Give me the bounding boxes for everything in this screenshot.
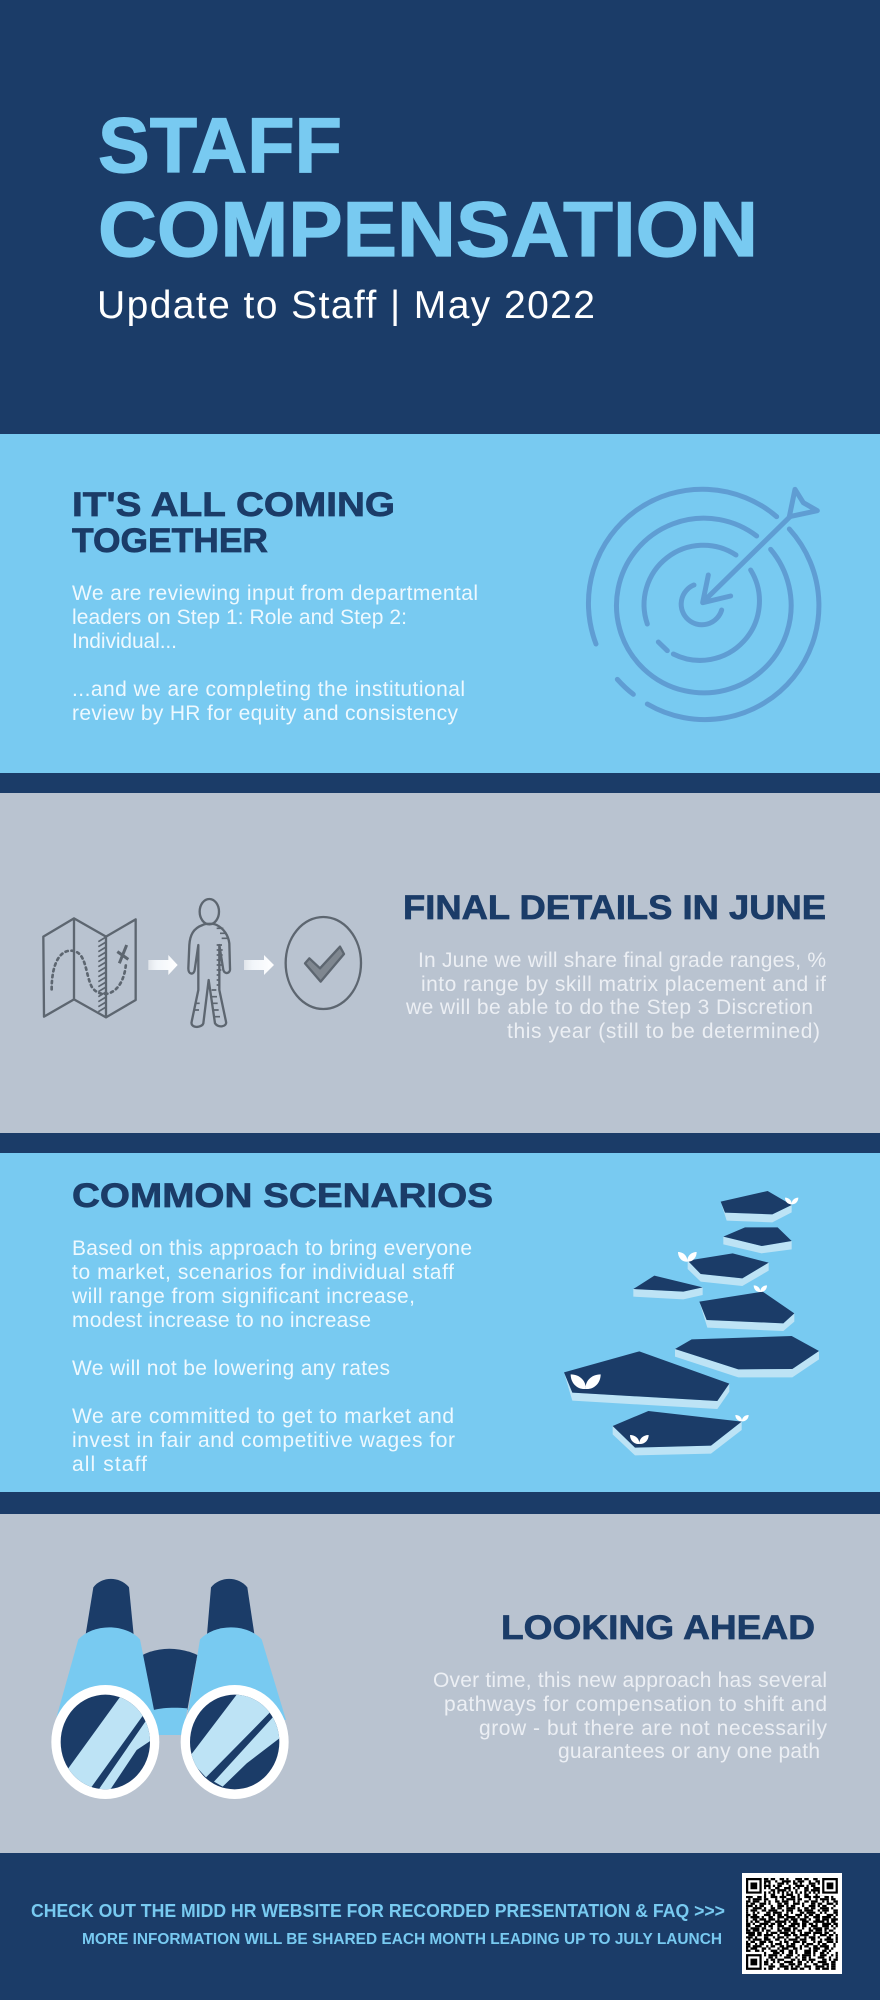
body text: all staff <box>72 1453 147 1476</box>
heading <box>72 486 395 560</box>
panel: common scenarios <box>0 1153 880 1492</box>
body text: Based on this approach to bring everyone <box>72 1237 472 1260</box>
icon: arrow <box>148 955 178 975</box>
panel: it's all coming together <box>0 434 880 773</box>
body text: ...and we are completing the institutional <box>72 678 465 701</box>
body text: In June we will share final grade ranges, % <box>418 949 826 972</box>
heading: TOGETHER <box>72 522 268 560</box>
body text: to market, scenarios for individual staff <box>72 1261 454 1284</box>
title <box>98 101 758 273</box>
icon group: map, person, check <box>43 899 361 1027</box>
body text: We are committed to get to market and <box>72 1405 454 1428</box>
icon: person <box>188 899 230 1027</box>
body text <box>433 1669 828 1763</box>
heading: LOOKING AHEAD <box>501 1609 815 1647</box>
body text: leaders on Step 1: Role and Step 2: <box>72 606 407 629</box>
body text <box>71 1237 472 1476</box>
icon: binoculars <box>51 1579 289 1799</box>
title: STAFF <box>98 101 342 189</box>
body text: this year (still to be determined) <box>507 1020 820 1043</box>
icon: arrow <box>244 955 274 975</box>
subtitle: Update to Staff | May 2022 <box>97 284 595 327</box>
heading: FINAL DETAILS IN JUNE <box>403 889 826 927</box>
body text: pathways for compensation to shift and <box>444 1693 827 1716</box>
body text: Over time, this new approach has several <box>433 1669 827 1692</box>
panel: final details in june <box>0 793 880 1133</box>
title: COMPENSATION <box>98 185 758 273</box>
body text: into range by skill matrix placement and if <box>421 973 826 996</box>
body text: grow - but there are not necessarily <box>479 1717 828 1740</box>
heading: COMMON SCENARIOS <box>72 1177 493 1215</box>
heading: IT'S ALL COMING <box>72 486 395 524</box>
panel: header <box>0 0 880 434</box>
QR code <box>742 1873 842 1974</box>
body text: modest increase to no increase <box>72 1309 371 1332</box>
body text: will range from significant increase, <box>71 1285 415 1308</box>
body text: Individual... <box>72 630 177 653</box>
body text <box>72 582 478 725</box>
footer <box>31 1873 842 1974</box>
footer link text: CHECK OUT THE MIDD HR WEBSITE FOR RECORDED PRESENTATION & FAQ >>> <box>31 1901 725 1921</box>
icon: map <box>43 918 136 1017</box>
icon: stepping stones <box>564 1191 819 1455</box>
panel: looking ahead <box>0 1514 880 1853</box>
icon: target with arrow <box>588 489 819 720</box>
footer note text: MORE INFORMATION WILL BE SHARED EACH MONTH LEADING UP TO JULY LAUNCH <box>82 1931 722 1948</box>
body text: We will not be lowering any rates <box>72 1357 390 1380</box>
body text: invest in fair and competitive wages for <box>72 1429 455 1452</box>
icon: checkmark circle <box>286 917 361 1009</box>
body text <box>405 949 826 1043</box>
body text: We are reviewing input from departmental <box>72 582 478 605</box>
body text: we will be able to do the Step 3 Discretion <box>405 996 813 1019</box>
body text: review by HR for equity and consistency <box>72 702 458 725</box>
body text: guarantees or any one path <box>558 1740 820 1763</box>
